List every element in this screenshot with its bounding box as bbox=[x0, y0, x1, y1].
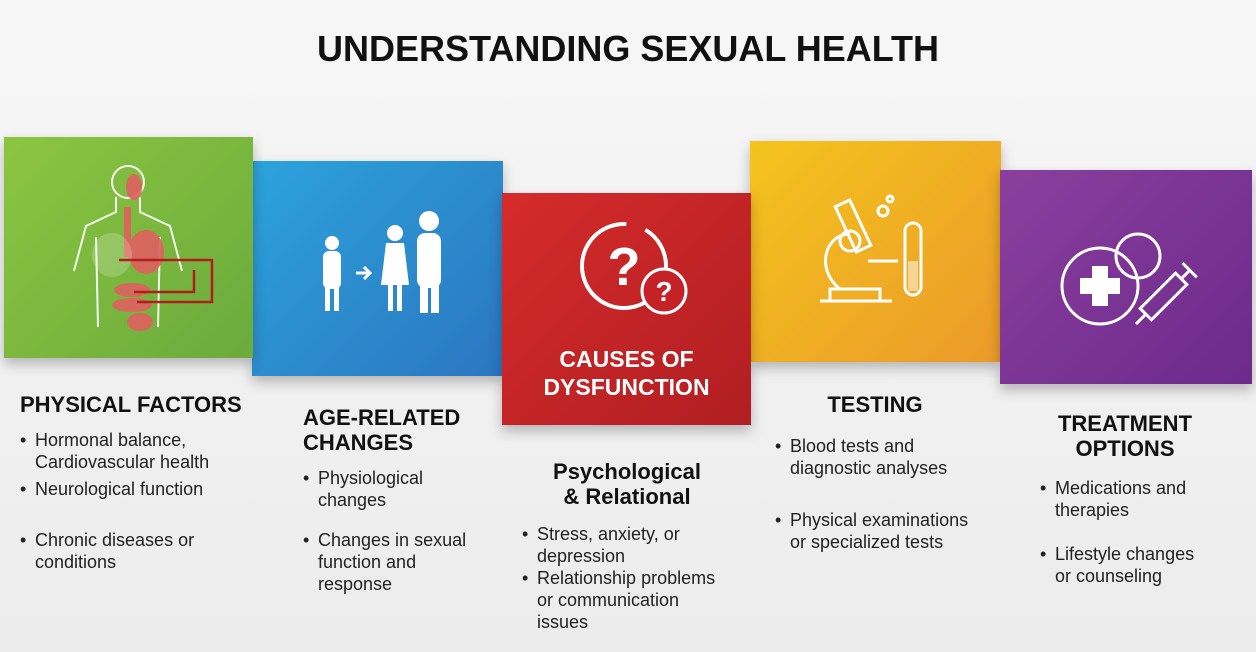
text: psychological: Relationship problems bbox=[537, 568, 715, 588]
panel: testing bbox=[750, 141, 1001, 362]
icon: question marks: ? bbox=[608, 237, 640, 297]
text: treatment: Medications and bbox=[1055, 478, 1186, 498]
text: physical factors: Cardiovascular health bbox=[35, 452, 209, 472]
icon: microscope bbox=[820, 194, 922, 302]
icon: question marks bbox=[580, 222, 688, 314]
icon: people bbox=[323, 211, 441, 313]
text: physical factors: Neurological function bbox=[35, 479, 203, 499]
text: psychological bbox=[522, 459, 715, 632]
text: testing: Blood tests and bbox=[790, 436, 914, 456]
text: age-related: function and bbox=[318, 552, 416, 572]
text: psychological: depression bbox=[537, 546, 625, 566]
text: testing: or specialized tests bbox=[790, 532, 943, 552]
text: testing: Physical examinations bbox=[790, 510, 968, 530]
text: testing: TESTING bbox=[827, 392, 923, 417]
text: age-related: CHANGES bbox=[303, 430, 413, 455]
text: age-related: AGE-RELATED bbox=[303, 405, 460, 430]
text: physical factors: Chronic diseases or bbox=[35, 530, 194, 550]
icon: body bbox=[73, 165, 214, 331]
title: UNDERSTANDING SEXUAL HEALTH bbox=[317, 28, 939, 69]
text: physical factors bbox=[20, 392, 242, 572]
panel: physical bbox=[4, 137, 253, 358]
panel heading: DYSFUNCTION bbox=[543, 374, 710, 400]
panel: treatment bbox=[1000, 170, 1252, 384]
panel heading: CAUSES OF bbox=[559, 346, 694, 372]
text: physical factors: conditions bbox=[35, 552, 116, 572]
text: physical factors: PHYSICAL FACTORS bbox=[20, 392, 242, 417]
panel: age bbox=[252, 161, 503, 376]
text: treatment: TREATMENT bbox=[1058, 411, 1192, 436]
text: psychological: & Relational bbox=[563, 484, 691, 509]
text: treatment: therapies bbox=[1055, 500, 1129, 520]
text: treatment: or counseling bbox=[1055, 566, 1162, 586]
icon: cross and syringe bbox=[1060, 232, 1198, 326]
text: testing: diagnostic analyses bbox=[790, 458, 947, 478]
text: treatment bbox=[1040, 411, 1194, 586]
text: psychological: Stress, anxiety, or bbox=[537, 524, 680, 544]
text: age-related bbox=[303, 405, 466, 594]
text: physical factors: Hormonal balance, bbox=[35, 430, 186, 450]
text: psychological: Psychological bbox=[553, 459, 701, 484]
text: treatment: OPTIONS bbox=[1075, 436, 1174, 461]
text: psychological: issues bbox=[537, 612, 588, 632]
text: age-related: Physiological bbox=[318, 468, 423, 488]
text: treatment: Lifestyle changes bbox=[1055, 544, 1194, 564]
text: age-related: Changes in sexual bbox=[318, 530, 466, 550]
text: age-related: changes bbox=[318, 490, 386, 510]
text: age-related: response bbox=[318, 574, 392, 594]
text: testing bbox=[776, 392, 968, 552]
panel heading bbox=[543, 346, 710, 400]
icon: question marks: ? bbox=[655, 276, 673, 307]
panel: causes bbox=[502, 193, 751, 425]
text: psychological: or communication bbox=[537, 590, 679, 610]
